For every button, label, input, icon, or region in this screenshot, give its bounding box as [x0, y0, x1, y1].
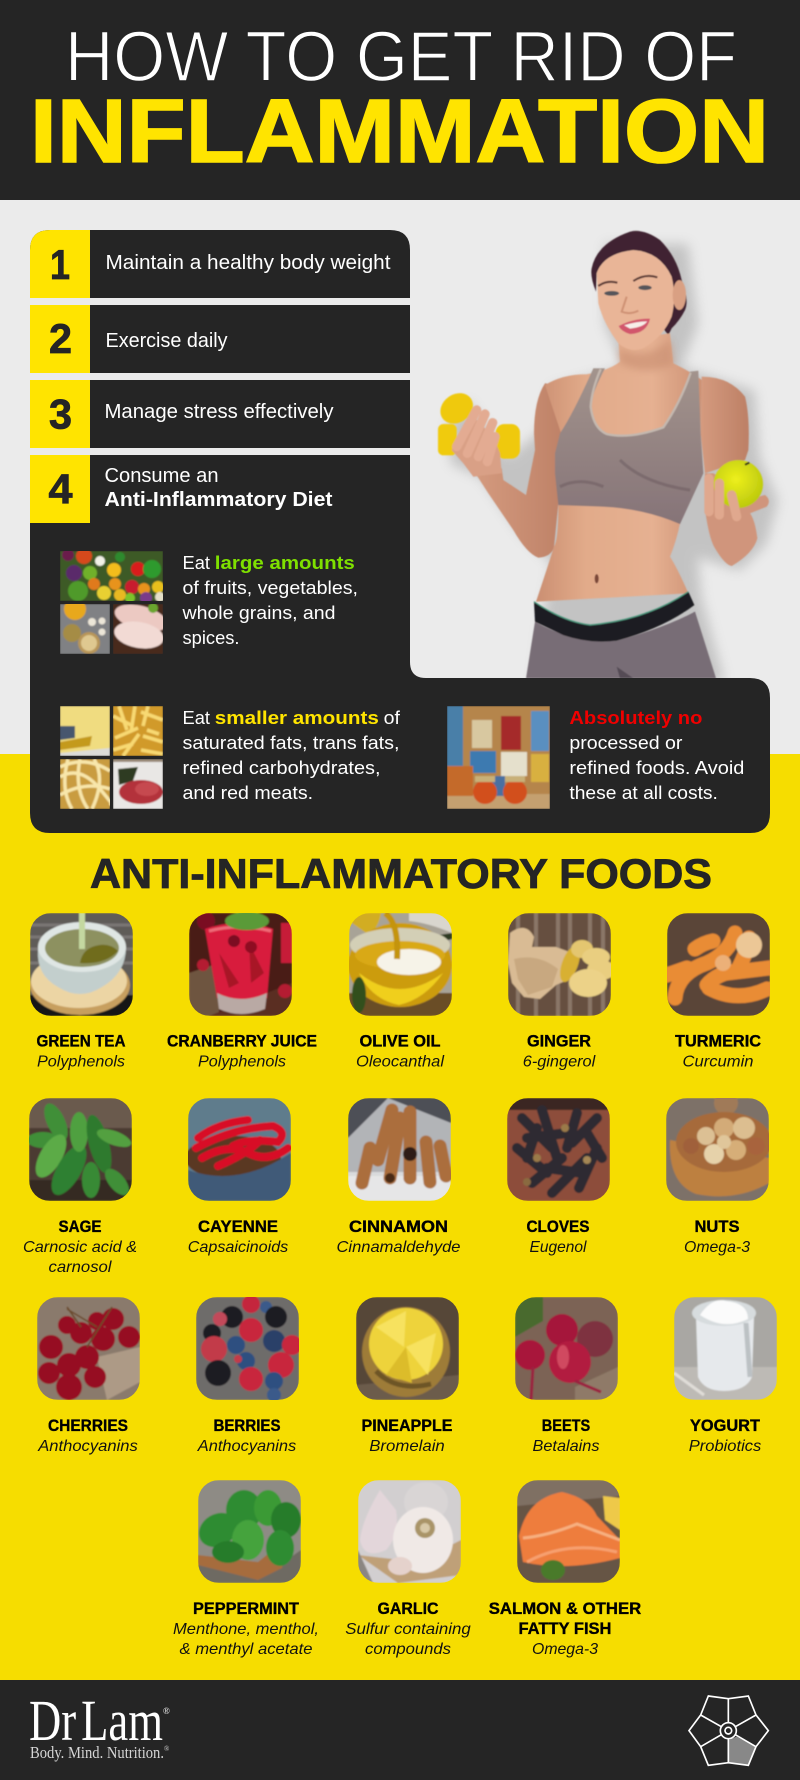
logo: Dr Lam wordmark: ® — [163, 1706, 170, 1716]
food tile: cinnamon — [348, 1098, 451, 1201]
step 3: Manage stress effectively — [104, 400, 334, 423]
food tile: pineapple — [356, 1297, 459, 1400]
food tile: beets — [515, 1297, 618, 1400]
food tile: cranberry juice — [189, 912, 292, 1016]
image: butter — [60, 706, 110, 756]
text: absolutely no: processed or — [569, 732, 682, 753]
food labels: row 2: CINNAMON — [349, 1218, 448, 1236]
text: eat large amounts: spices. — [182, 627, 240, 648]
photo: woman with dumbbell and apple — [434, 231, 778, 682]
step 3: 3 — [49, 390, 72, 438]
food labels: row 1: Polyphenols — [198, 1054, 286, 1070]
food tile: cherries — [37, 1297, 140, 1400]
food labels: row 3: Probiotics — [689, 1438, 761, 1455]
step 2: Exercise daily — [106, 329, 228, 352]
right arm — [701, 377, 749, 473]
text: absolutely no — [569, 707, 744, 803]
food labels: row 4: Menthone, menthol, — [173, 1621, 319, 1638]
food tile: berries — [196, 1295, 302, 1402]
apple — [714, 460, 763, 508]
waistband — [534, 592, 694, 642]
background: yellow band — [0, 754, 800, 1680]
face — [597, 250, 674, 350]
title line 1: HOW TO GET RID OF — [65, 18, 737, 97]
step 1 — [30, 230, 410, 298]
food labels: row 4 — [173, 1600, 641, 1658]
food labels: row 3: BERRIES — [214, 1417, 280, 1435]
image: chicken — [113, 604, 163, 654]
food labels: row 1 — [36, 1032, 761, 1070]
food labels: row 2: Capsaicinoids — [188, 1239, 288, 1256]
text: eat smaller amounts: and red meats. — [182, 782, 313, 803]
tank top — [555, 368, 703, 524]
text: eat large amounts: whole grains, and — [181, 602, 336, 623]
footer — [0, 1680, 800, 1780]
text: eat large amounts: Eat — [182, 552, 210, 573]
food labels: row 3: YOGURT — [690, 1417, 760, 1435]
left hand — [452, 417, 502, 477]
text: eat smaller amounts: of — [384, 707, 401, 728]
logo: Dr Lam wordmark: ® — [164, 1745, 170, 1753]
food tile: nuts — [666, 1091, 772, 1201]
food labels: row 1: 6-gingerol — [523, 1054, 596, 1070]
food labels: row 1: Curcumin — [682, 1054, 754, 1070]
step 1: Maintain a healthy body weight — [106, 251, 391, 274]
food labels: row 4: SALMON & OTHER — [489, 1600, 641, 1618]
step 2 — [30, 305, 410, 373]
food tile: sage — [27, 1098, 133, 1201]
food tile: turmeric — [667, 913, 770, 1016]
food labels: row 2: SAGE — [58, 1218, 102, 1236]
heading: anti-inflammatory foods: ANTI-INFLAMMATORY FOODS — [90, 850, 712, 897]
image: red meat — [113, 759, 163, 809]
step 2: 2 — [49, 315, 72, 362]
right forearm — [704, 473, 769, 566]
food labels: row 1: GREEN TEA — [36, 1032, 126, 1050]
food labels: row 2: Carnosic acid & — [23, 1239, 137, 1256]
step 4 panel: 4 — [48, 466, 73, 512]
text: eat large amounts — [181, 552, 358, 648]
food labels: row 1: Polyphenols — [37, 1054, 125, 1070]
food labels: row 3: Anthocyanins — [37, 1438, 138, 1455]
text: eat smaller amounts: smaller amounts — [215, 707, 379, 728]
image: french fries — [113, 706, 163, 756]
step 4 panel: Consume an — [104, 464, 218, 487]
food tile: ginger — [508, 913, 615, 1016]
food labels: row 2 — [23, 1218, 750, 1276]
background: grey band — [0, 200, 800, 754]
food tile: peppermint — [193, 1480, 301, 1583]
food tile: green tea — [30, 913, 133, 1016]
food labels: row 2: NUTS — [694, 1218, 740, 1236]
title line 2: INFLAMMATION — [30, 82, 769, 182]
food tile: salmon — [517, 1480, 620, 1583]
dumbbell — [434, 387, 479, 430]
food labels: row 3: Bromelain — [369, 1438, 445, 1455]
food labels: row 4: PEPPERMINT — [193, 1600, 299, 1618]
text: eat smaller amounts: saturated fats, trans fats, — [182, 732, 400, 753]
food labels: row 4: GARLIC — [378, 1600, 439, 1618]
step 4 panel: Anti-Inflammatory Diet — [104, 488, 333, 511]
food labels: row 2: CAYENNE — [198, 1218, 278, 1236]
text: eat smaller amounts: refined carbohydrates, — [182, 757, 380, 778]
food labels: row 1: GINGER — [527, 1032, 591, 1050]
food labels: row 3: BEETS — [542, 1417, 590, 1435]
food labels: row 3: Anthocyanins — [197, 1438, 296, 1455]
food labels: row 1: Oleocanthal — [356, 1054, 444, 1070]
text: eat smaller amounts: Eat — [182, 707, 210, 728]
food labels: row 2: Eugenol — [530, 1239, 587, 1256]
text: absolutely no: refined foods. Avoid — [569, 757, 744, 778]
food labels: row 2: Omega-3 — [684, 1239, 750, 1256]
food labels: row 3 — [37, 1417, 761, 1455]
food labels: row 4: & menthyl acetate — [180, 1641, 313, 1658]
food labels: row 3: CHERRIES — [48, 1417, 128, 1435]
text: eat large amounts: of fruits, vegetables, — [182, 577, 358, 598]
step 4 panel — [30, 455, 770, 833]
food tile: olive oil — [348, 913, 452, 1016]
image: fruits and vegetables — [60, 551, 163, 601]
text: absolutely no: these at all costs. — [569, 782, 718, 803]
food labels: row 1: CRANBERRY JUICE — [167, 1032, 317, 1050]
food tile: garlic — [358, 1480, 461, 1583]
text: absolutely no: Absolutely no — [569, 707, 702, 728]
step 3 — [30, 380, 410, 448]
logo: Dr Lam wordmark: Dr Lam — [29, 1688, 163, 1753]
step 1: 1 — [50, 241, 70, 288]
image: processed foods — [447, 706, 550, 809]
food labels: row 3: PINEAPPLE — [362, 1417, 452, 1435]
navel — [595, 574, 599, 583]
food tile: yogurt — [674, 1297, 777, 1400]
food labels: row 4: Sulfur containing — [345, 1621, 471, 1638]
image: spices — [60, 604, 110, 654]
torso — [536, 333, 702, 602]
food labels: row 4: Omega-3 — [532, 1641, 598, 1658]
food labels: row 3: Betalains — [532, 1438, 600, 1455]
left arm — [473, 383, 570, 558]
food labels: row 2: carnosol — [48, 1259, 112, 1276]
food tile: cloves — [507, 1098, 610, 1201]
icon: hexagon emblem — [689, 1696, 768, 1765]
food labels: row 1: TURMERIC — [675, 1032, 761, 1050]
panel: steps and diet advice — [30, 230, 770, 833]
pants — [526, 612, 716, 678]
hair — [591, 231, 687, 335]
food labels: row 1: OLIVE OIL — [360, 1032, 440, 1050]
header — [0, 0, 800, 200]
food labels: row 4: compounds — [365, 1641, 451, 1658]
text: eat smaller amounts — [182, 707, 401, 803]
food labels: row 2: Cinnamaldehyde — [336, 1239, 461, 1256]
image: pasta — [60, 759, 110, 809]
text: eat large amounts: large amounts — [215, 552, 355, 573]
food tile: cayenne — [185, 1098, 291, 1201]
logo: Dr Lam wordmark: Body. Mind. Nutrition. — [30, 1743, 164, 1762]
food labels: row 2: CLOVES — [526, 1218, 590, 1236]
food labels: row 4: FATTY FISH — [518, 1620, 612, 1638]
